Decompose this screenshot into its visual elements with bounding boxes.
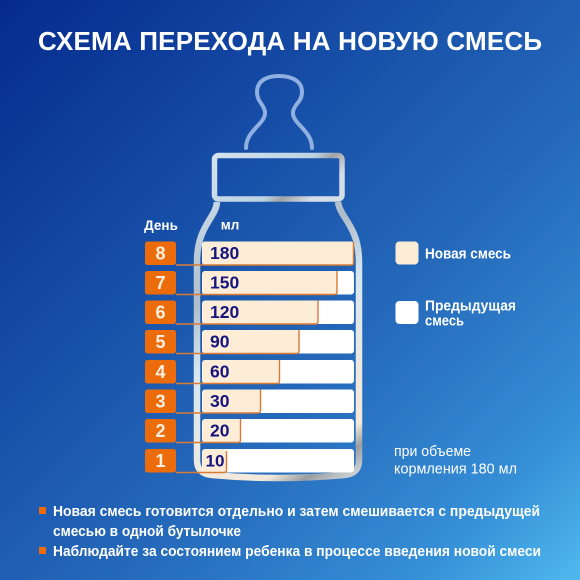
row: day 5 xyxy=(145,330,354,354)
row: day 7: 150 xyxy=(210,272,239,292)
note: feeding volume: при объеме xyxy=(394,444,471,460)
note: feeding volume: кормления 180 мл xyxy=(394,462,517,478)
row: day 6: 6 xyxy=(155,302,166,322)
bullet note: preparation: Новая смесь готовится отдельно и затем смешивается с предыдущей xyxy=(53,503,540,520)
row: day 7: 7 xyxy=(155,273,166,293)
title: СХЕМА ПЕРЕХОДА НА НОВУЮ СМЕСЬ xyxy=(38,26,542,56)
row: day 2 xyxy=(145,419,354,442)
row: day 4 xyxy=(145,360,354,384)
row: day 6 xyxy=(145,300,354,324)
row: day 4: 4 xyxy=(155,362,166,382)
row: day 1: 1 xyxy=(155,451,166,471)
legend: previous formula xyxy=(396,298,516,330)
row: day 5: 5 xyxy=(155,332,166,352)
bullet note: preparation xyxy=(39,503,540,540)
row: day 8: 180 xyxy=(210,243,239,263)
row: day 8: 8 xyxy=(155,244,166,264)
row: day 2: 2 xyxy=(155,421,166,441)
bullet note: preparation: смесью в одной бутылочке xyxy=(53,523,241,540)
row: day 1 xyxy=(145,449,354,472)
label: day column heading: День xyxy=(144,218,178,233)
legend: new formula: Новая смесь xyxy=(425,246,511,262)
row: day 2: 20 xyxy=(210,420,230,440)
icon: bottle body xyxy=(197,202,359,478)
bullet note: monitoring: Наблюдайте за состоянием ребенка в процессе введения новой смеси xyxy=(53,543,541,560)
row: day 6: 120 xyxy=(210,302,239,322)
icon: bottle nipple xyxy=(246,76,312,148)
row: day 1: 10 xyxy=(206,452,224,470)
row: day 3: 3 xyxy=(155,392,166,412)
row: day 7 xyxy=(145,271,354,294)
legend: new formula xyxy=(396,242,511,264)
note: feeding volume xyxy=(394,444,517,478)
row: day 3 xyxy=(145,390,354,413)
row: day 3: 30 xyxy=(210,391,230,411)
legend: previous formula: смесь xyxy=(425,314,464,330)
icon: bottle cap xyxy=(214,156,342,199)
row: day 4: 60 xyxy=(210,362,230,382)
label: ml column heading: мл xyxy=(221,218,239,232)
row: day 8 xyxy=(145,242,354,265)
row: day 5: 90 xyxy=(210,332,230,352)
legend: previous formula: Предыдущая xyxy=(425,298,516,314)
